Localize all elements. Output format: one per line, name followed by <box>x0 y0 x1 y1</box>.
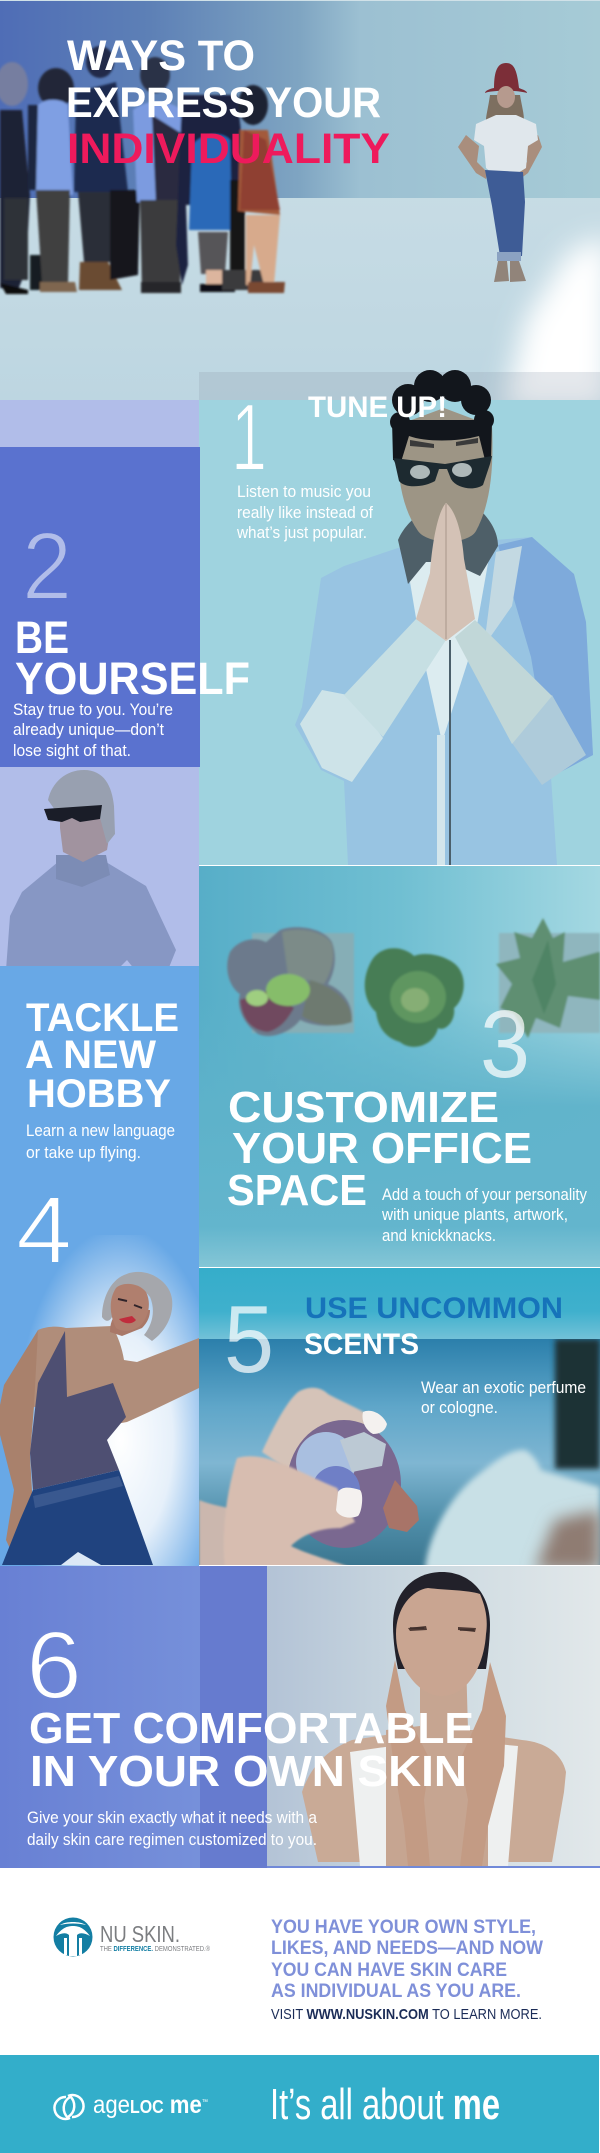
logo text: ageLOC me: ageLOC me <box>93 2091 206 2119</box>
heading: tackle a new hobby: TACKLE <box>26 996 179 1040</box>
number 5: 5 <box>224 1286 274 1393</box>
title: WAYS TO <box>67 32 255 80</box>
text block: tip 4: Learn a new language <box>26 1121 175 1140</box>
title <box>66 32 390 173</box>
number 2: 2 <box>22 513 72 620</box>
logo: Nu Skin <box>54 1918 211 1956</box>
panel: 6 get comfortable <box>0 1566 600 1868</box>
logo: Nu Skin: THE DIFFERENCE. DEMONSTRATED.® <box>100 1945 211 1953</box>
photo: man with glasses <box>295 370 593 865</box>
text block: tip 6: daily skin care regimen customized to you. <box>27 1830 317 1849</box>
text block: closing message: LIKES, AND NEEDS—AND NOW <box>271 1938 543 1959</box>
text block: tip 2: already unique—don’t <box>13 720 164 739</box>
text block: tip 1: really like instead of <box>237 503 373 522</box>
heading: use uncommon scents <box>304 1292 563 1361</box>
text block: closing message: AS INDIVIDUAL AS YOU ARE. <box>271 1981 521 2002</box>
photo: dancing woman <box>0 1272 199 1570</box>
panel: 1 tune up <box>199 370 600 865</box>
text block: tip 3 <box>381 1185 587 1245</box>
panel: 4 tackle a new hobby <box>0 966 199 1570</box>
text block: closing message: YOU CAN HAVE SKIN CARE <box>271 1960 507 1981</box>
text block: tip 2: Stay true to you. You’re <box>13 700 173 719</box>
icon: Nu Skin emblem <box>54 1918 92 1956</box>
text block: tip 6 <box>27 1808 317 1849</box>
heading: be yourself: BE <box>15 612 69 663</box>
logo: Nu Skin: NU SKIN. <box>100 1921 180 1947</box>
heading: customize <box>227 1083 532 1215</box>
text block: tip 2: lose sight of that. <box>13 741 131 760</box>
text block: tip 5 <box>421 1378 586 1417</box>
heading: customize: YOUR OFFICE <box>232 1124 532 1173</box>
logo text: ageLOC me: ™ <box>202 2099 208 2106</box>
text block: tip 4 <box>26 1121 175 1162</box>
text block: closing message: YOU HAVE YOUR OWN STYLE, <box>271 1917 536 1938</box>
heading: customize: SPACE <box>227 1166 367 1215</box>
plant 2 <box>365 948 464 1047</box>
heading: be yourself <box>15 612 250 704</box>
footer band <box>0 2055 599 2153</box>
heading: tackle a new hobby: HOBBY <box>27 1072 171 1116</box>
title: EXPRESS YOUR <box>66 79 381 127</box>
photo: crowd of people <box>0 46 285 294</box>
text block: tip 1 <box>236 482 373 542</box>
plant 3 <box>496 918 600 1038</box>
heading: customize: CUSTOMIZE <box>228 1083 499 1132</box>
text block: closing message <box>271 1917 543 2023</box>
text block: tip 6: Give your skin exactly what it needs with a <box>27 1808 317 1827</box>
panel: 5 use uncommon scents <box>199 1268 600 1576</box>
text block: tip 3: with unique plants, artwork, <box>381 1205 568 1224</box>
text block: tip 2 <box>13 700 173 760</box>
heading: tackle a new hobby <box>25 996 179 1116</box>
heading: get comfortable <box>29 1704 474 1796</box>
number 4: 4 <box>16 1177 72 1284</box>
heading: be yourself: YOURSELF <box>15 653 250 704</box>
icon: ageLOC rings <box>54 2095 84 2119</box>
heading: use uncommon scents: SCENTS <box>304 1328 419 1361</box>
text block: closing message: VISIT WWW.NUSKIN.COM TO LEARN MORE. <box>271 2006 542 2023</box>
text block: tip 1: Listen to music you <box>237 482 371 501</box>
heading: use uncommon scents: USE UNCOMMON <box>305 1292 563 1325</box>
panel: 1 tune up: 1 <box>231 384 267 491</box>
number 3: 3 <box>480 991 530 1098</box>
heading: get comfortable: GET COMFORTABLE <box>29 1704 474 1753</box>
heading: tune up: TUNE UP! <box>308 391 447 424</box>
number 6: 6 <box>26 1612 82 1719</box>
title: INDIVIDUALITY <box>67 125 390 173</box>
text block: tip 5: or cologne. <box>421 1398 498 1417</box>
heading: get comfortable: IN YOUR OWN SKIN <box>30 1747 467 1796</box>
heading: tackle a new hobby: A NEW <box>25 1033 156 1077</box>
hero panel <box>0 0 600 410</box>
text block: tip 5: Wear an exotic perfume <box>421 1378 586 1397</box>
panel: 2 be yourself <box>0 400 250 970</box>
photo: perfume bottle in hand <box>199 1339 600 1576</box>
photo: woman in red hat <box>458 63 542 282</box>
tagline: It’s all about me <box>270 2080 500 2129</box>
photo: man with sunglasses <box>0 767 199 970</box>
panel: 3 customize your office <box>199 866 600 1267</box>
plant 1 <box>227 927 354 1036</box>
text block: tip 1: what’s just popular. <box>236 523 367 542</box>
photo: woman touching face <box>302 1572 566 1866</box>
text block: tip 3: and knickknacks. <box>382 1226 496 1245</box>
text block: tip 4: or take up flying. <box>26 1143 141 1162</box>
